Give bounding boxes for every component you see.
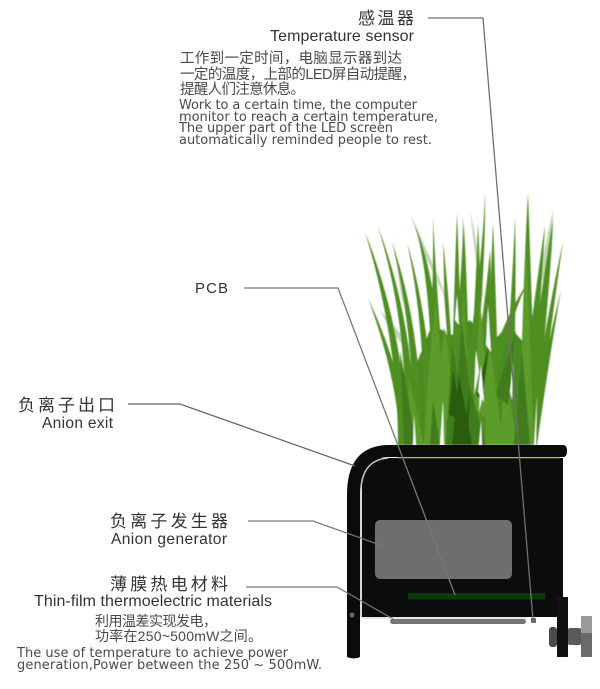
green top edge — [397, 457, 560, 459]
text block: temperature sensor description: automatically reminded people to rest. — [179, 133, 432, 148]
text block: temperature sensor description: The upper part of the LED screen — [178, 121, 393, 136]
heading: anion generator: Anion generator — [111, 531, 227, 548]
leader: PCB — [244, 288, 455, 595]
heading: anion generator: 负离子发生器 — [110, 512, 228, 531]
leader: anion generator — [248, 521, 383, 546]
temperature sensor dot — [531, 618, 536, 623]
leader: temperature sensor — [428, 18, 533, 620]
heading: anion exit: 负离子出口 — [18, 396, 115, 415]
heading: anion generator — [110, 512, 228, 548]
highlight on shell — [361, 458, 388, 617]
leader: anion exit — [128, 404, 355, 466]
leader: thermoelectric — [246, 587, 400, 623]
text block: temperature sensor description: 提醒人们注意休息。 — [180, 80, 305, 98]
text block: temperature sensor description: 一定的温度，上部的LED屏自动提醒， — [180, 66, 416, 83]
text block: thermoelectric description: generation,Power between the 250 ~ 500mW. — [17, 658, 322, 673]
heading: temperature sensor: Temperature sensor — [270, 28, 415, 45]
device: top shell and left leg — [347, 445, 567, 658]
heading: anion exit — [18, 396, 115, 432]
leg rivet — [350, 612, 354, 618]
heading: thin-film thermoelectric materials: 薄膜热电材料 — [110, 575, 228, 594]
right bracket and bolt — [549, 597, 592, 657]
text block: temperature sensor description: 工作到一定时间，电脑显示器到达 — [180, 50, 402, 67]
text block: temperature sensor description: Work to a certain time, the computer — [179, 98, 418, 113]
thermoelectric strip — [390, 619, 526, 624]
label: PCB: PCB — [195, 280, 228, 297]
text block: thermoelectric description — [16, 613, 322, 673]
PCB board — [408, 593, 545, 600]
text block: thermoelectric description: 利用温差实现发电， — [95, 613, 217, 629]
heading: temperature sensor: 感温器 — [358, 9, 414, 28]
text block: temperature sensor description — [178, 50, 438, 148]
heading: thin-film thermoelectric materials: Thin-film thermoelectric materials — [34, 593, 272, 610]
grass plant — [365, 193, 563, 445]
heading: temperature sensor — [270, 9, 415, 45]
text block: temperature sensor description: monitor to reach a certain temperature, — [179, 110, 438, 125]
grass base mass — [402, 320, 538, 445]
anion generator panel — [375, 520, 512, 579]
heading: anion exit: Anion exit — [42, 415, 114, 432]
text block: thermoelectric description: 功率在250~500mW之间。 — [95, 628, 262, 644]
text block: thermoelectric description: The use of temperature to achieve power — [16, 646, 289, 661]
device: back panel — [362, 458, 563, 617]
heading: thin-film thermoelectric materials — [34, 575, 272, 610]
